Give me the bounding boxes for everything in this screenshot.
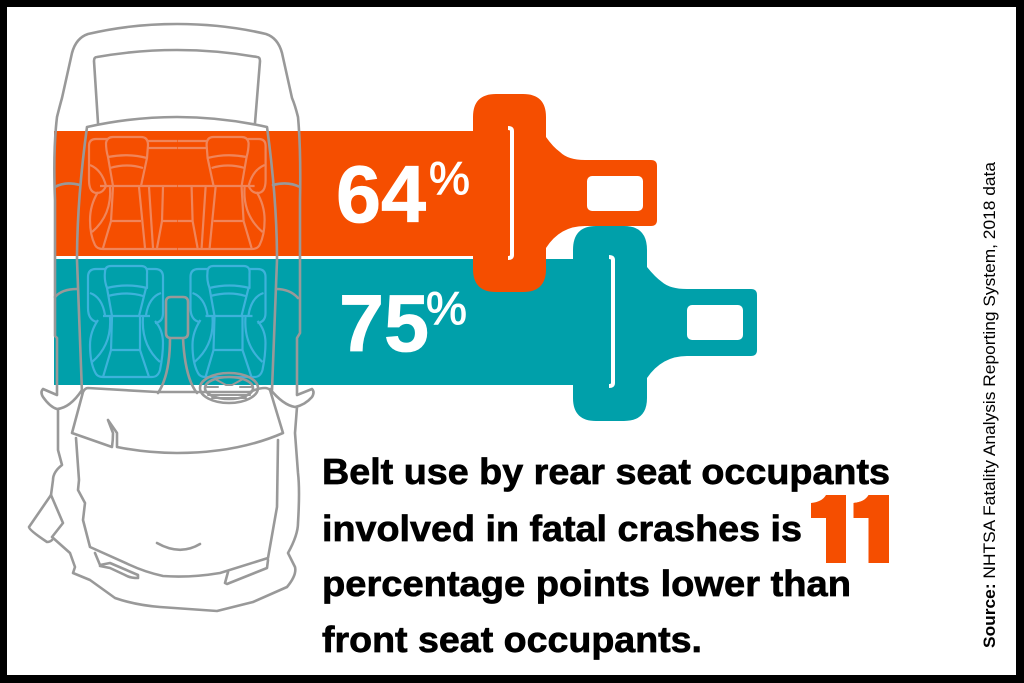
hood crease [157,543,200,550]
stat: front seat 75%: % [426,282,467,334]
big number 11: 1 [840,474,920,586]
stat: rear seat 64%: 64 [336,150,426,240]
cabin pillars and roof edge [77,117,277,393]
description text: percentage points lower than [322,563,851,604]
stat: rear seat 64%: % [429,152,470,204]
lower car body [51,407,299,611]
orange seat belt bar: rear seat [54,94,657,292]
door arcs [55,183,300,298]
stat: rear seat 64% [336,150,470,240]
big number 11: 1 [798,474,877,586]
steering wheel [200,373,258,403]
description text [322,451,890,660]
hood [76,438,278,577]
rear window [94,50,260,123]
source note: Source: NHTSA Fatality Analysis Reporting System, 2018 data [980,161,999,648]
car body shell [54,24,300,394]
stat: front seat 75%: 75 [339,279,429,369]
teal seat belt bar: front seat [54,226,757,421]
windshield and dash [72,388,283,453]
center console [158,297,197,393]
front seats [88,266,266,377]
side mirrors [42,389,314,409]
description text: involved in fatal crashes is [322,508,802,549]
rear seats [89,137,266,249]
car outline [29,24,314,611]
big number 11 [811,495,889,563]
description text: Belt use by rear seat occupants [322,451,890,492]
description text: front seat occupants. [322,619,702,660]
left headlight [95,553,138,578]
left flap [29,495,52,542]
right headlight [225,560,268,584]
